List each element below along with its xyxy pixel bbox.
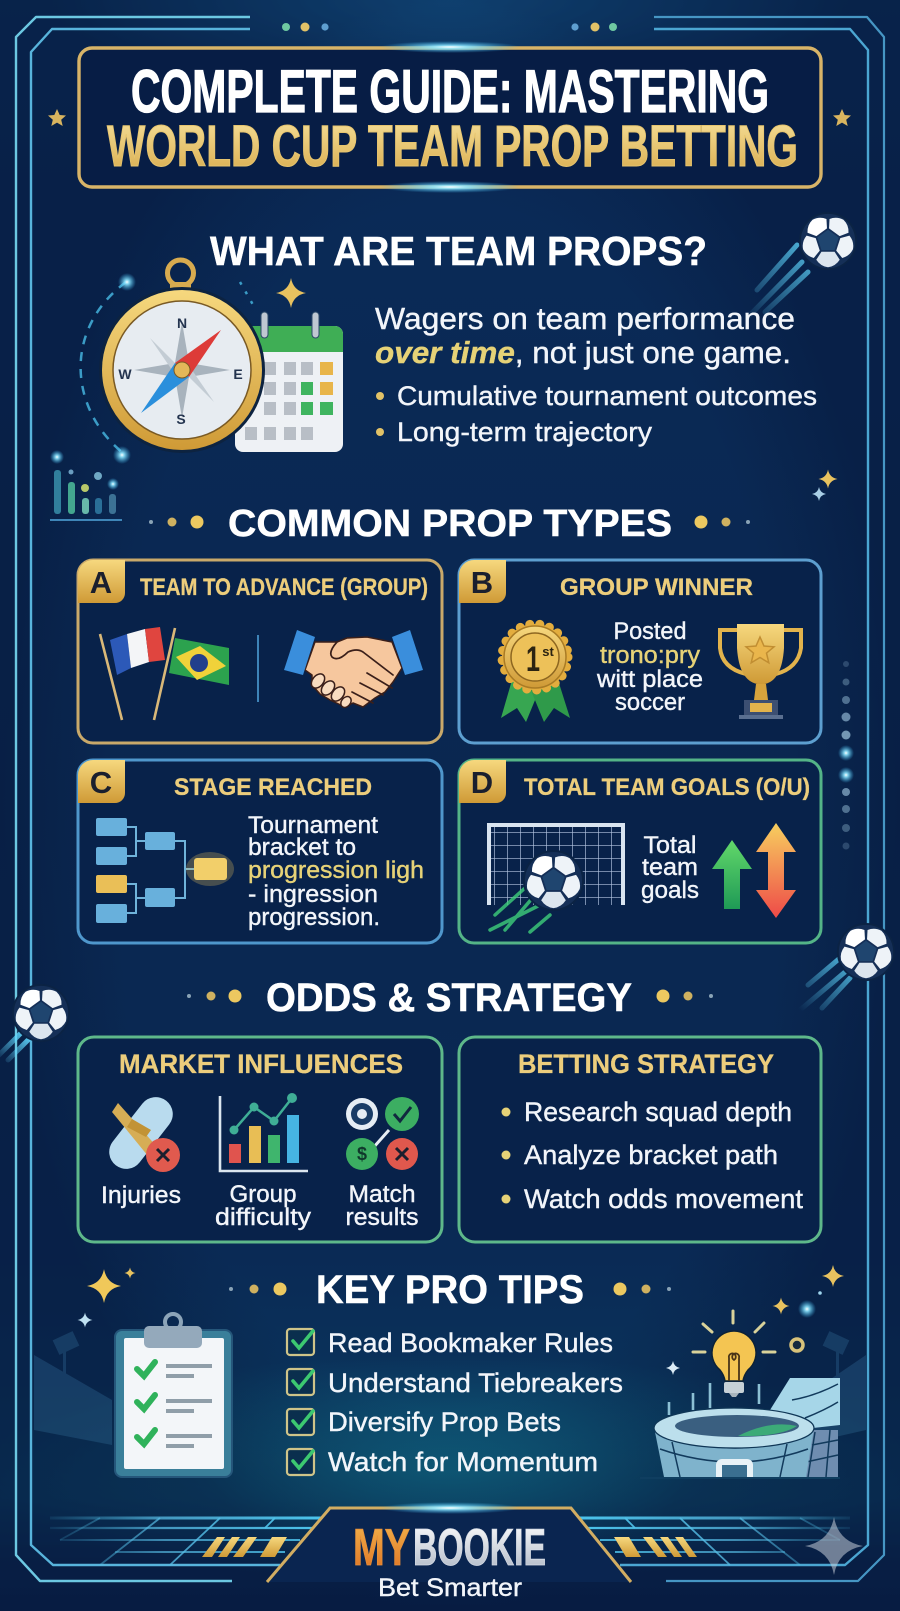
intro text block: Cumulative tournament outcomes — [397, 381, 817, 411]
icon: trophy — [720, 624, 801, 719]
badge B — [459, 560, 506, 603]
heading: what are team props: WHAT ARE TEAM PROPS? — [210, 228, 707, 274]
heading: odds and strategy: ODDS & STRATEGY — [266, 976, 632, 1020]
icon: light bulb — [666, 1311, 803, 1397]
right glowing dot column — [838, 661, 854, 850]
card D text: goals — [641, 877, 699, 904]
panel: C stage reached — [78, 760, 442, 943]
icon: stadium — [640, 1378, 840, 1478]
footer stripes right — [614, 1537, 697, 1557]
footer logo plate: BOOKIE — [413, 1519, 546, 1577]
icon: handshake — [284, 630, 423, 709]
sparkles lower right — [772, 1265, 844, 1318]
heading A: TEAM TO ADVANCE (GROUP) — [140, 574, 428, 601]
panel: A team to advance — [78, 560, 442, 743]
heading: key pro tips — [229, 1268, 671, 1312]
mini bar chart decoration — [50, 450, 122, 521]
logo wordmark: MY — [353, 1519, 410, 1577]
panel: D total team goals: D — [471, 765, 493, 800]
panel: D total team goals — [459, 760, 821, 943]
orbit arc with dots — [81, 273, 256, 464]
panel: betting strategy — [459, 1037, 821, 1242]
icon: first place rosette — [501, 624, 570, 722]
top dots — [282, 22, 617, 32]
panel: B group winner: B — [471, 565, 493, 600]
intro text block: Long-term trajectory — [397, 417, 653, 447]
footer field grid left — [50, 1518, 335, 1565]
panel: market influences — [78, 1037, 442, 1242]
heading B: GROUP WINNER — [560, 574, 753, 601]
card B text: trono:pry — [600, 642, 700, 669]
stars beside title — [48, 109, 851, 126]
card B text: soccer — [615, 689, 685, 716]
intro text block: over time, not just one game. — [375, 335, 791, 370]
icon: first place rosette: 1 — [526, 640, 540, 679]
icon: match results — [346, 1097, 419, 1170]
icon: compass: E — [233, 366, 243, 382]
icon: compass: W — [118, 366, 132, 382]
market labels — [101, 1181, 418, 1231]
card B text — [596, 618, 703, 716]
icon: compass — [99, 260, 265, 453]
card C text: - ingression — [248, 881, 378, 908]
card D text: Total — [644, 832, 696, 859]
icon: goal and ball — [489, 825, 623, 932]
soccer ball top right — [745, 213, 857, 320]
badge D — [459, 760, 506, 803]
heading D: TOTAL TEAM GOALS (O/U) — [524, 774, 810, 801]
icon: group difficulty chart — [220, 1093, 308, 1171]
faint stadium silhouettes — [34, 1331, 866, 1445]
strategy bullets: Watch odds movement — [524, 1184, 803, 1214]
strategy bullets: Research squad depth — [524, 1097, 792, 1127]
card B text: witt place — [596, 666, 703, 693]
icon: crossed flags — [100, 627, 229, 720]
tips checklist — [287, 1328, 623, 1477]
panel: A team to advance: A — [90, 565, 112, 600]
strategy heading: BETTING STRATEGY — [518, 1049, 774, 1079]
icon: injury bandage — [102, 1090, 180, 1176]
market labels: Match — [348, 1181, 416, 1208]
card C text: progression ligh — [248, 857, 424, 884]
card C text — [248, 812, 424, 931]
icon: green up arrow — [712, 840, 752, 909]
icon: calendar — [235, 312, 343, 452]
card C text: Tournament — [248, 812, 378, 839]
icon: compass: N — [177, 315, 187, 331]
gold sparkle — [276, 278, 306, 308]
soccer ball right — [800, 924, 895, 1010]
tips checklist: Read Bookmaker Rules — [328, 1328, 613, 1358]
panel: B group winner — [459, 560, 821, 743]
soccer ball left — [0, 985, 70, 1060]
tournament bracket — [96, 818, 234, 923]
footer field grid right — [565, 1518, 850, 1565]
heading: common prop types: COMMON PROP TYPES — [228, 503, 672, 545]
card D text — [641, 832, 699, 904]
badge C — [78, 760, 125, 803]
panel: C stage reached: C — [90, 765, 112, 800]
sparkles right — [812, 470, 838, 501]
card C text: progression. — [248, 904, 380, 931]
strategy bullets: Analyze bracket path — [524, 1140, 778, 1170]
card C text: bracket to — [248, 834, 356, 861]
sparkles lower left — [78, 1268, 136, 1328]
heading: key pro tips: KEY PRO TIPS — [316, 1268, 584, 1312]
icon: over under arrow — [756, 823, 796, 918]
tips checklist: Understand Tiebreakers — [328, 1368, 623, 1398]
market labels: results — [346, 1204, 418, 1231]
watermark sparkle — [805, 1517, 863, 1575]
market labels: difficulty — [215, 1204, 311, 1231]
icon: compass: S — [176, 411, 186, 427]
strategy bullets — [502, 1097, 803, 1214]
tips checklist: Diversify Prop Bets — [328, 1407, 561, 1437]
badge A — [78, 560, 125, 603]
tips checklist: Watch for Momentum — [328, 1447, 598, 1477]
card B text: Posted — [614, 618, 686, 645]
icon: clipboard — [115, 1314, 232, 1477]
intro text block — [375, 301, 817, 447]
intro text block: Wagers on team performance — [375, 301, 795, 336]
footer stripes left — [202, 1537, 287, 1557]
market labels: Group — [230, 1181, 296, 1208]
card D text: team — [642, 854, 698, 881]
footer logo plate — [267, 1502, 631, 1602]
market labels: Injuries — [101, 1182, 181, 1209]
icon: first place rosette: st — [542, 644, 554, 659]
tagline: Bet Smarter — [378, 1574, 522, 1602]
title banner — [79, 41, 821, 193]
heading C: STAGE REACHED — [174, 774, 372, 801]
market heading: MARKET INFLUENCES — [119, 1049, 403, 1079]
icon: match results: $ — [357, 1144, 367, 1164]
